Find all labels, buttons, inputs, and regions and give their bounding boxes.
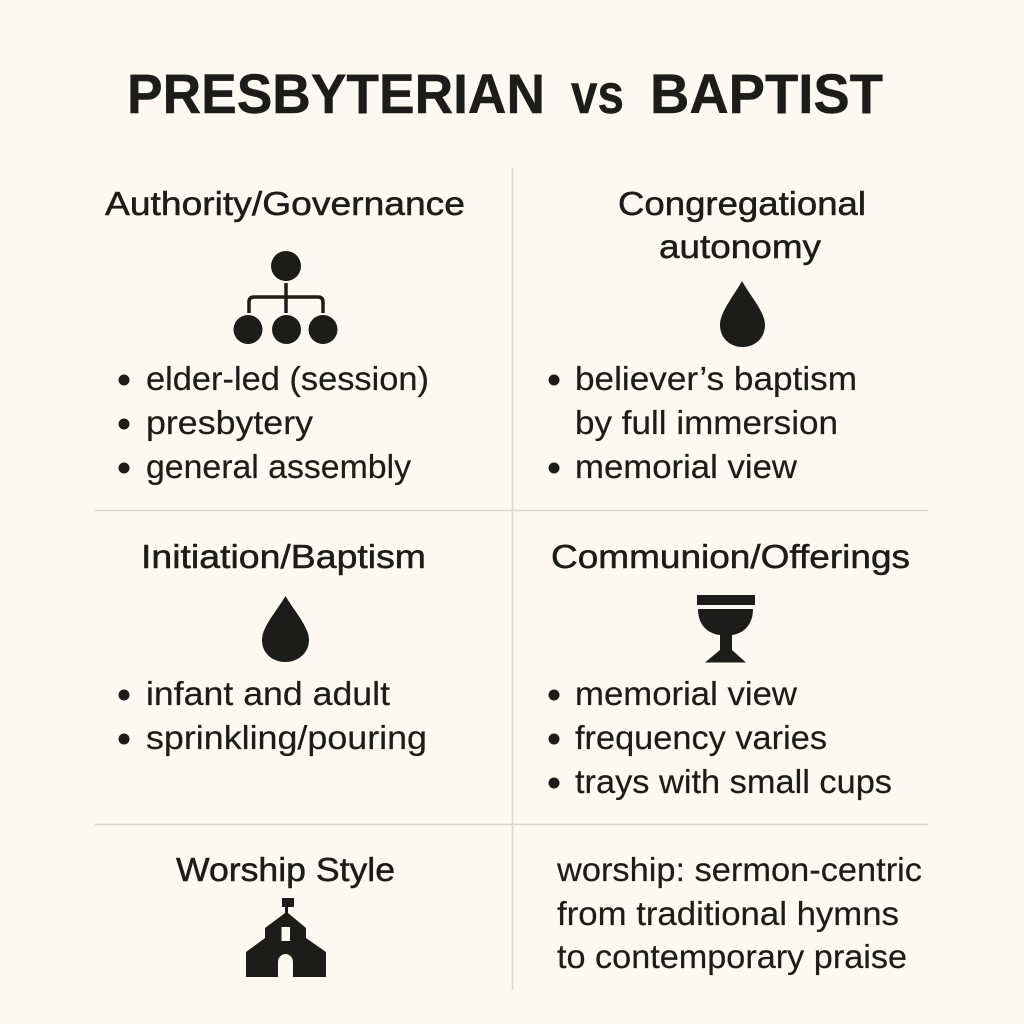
text block: baptist worship: worship: sermon-centric	[556, 852, 922, 889]
list: governance bullets: presbytery	[146, 405, 313, 442]
heading: initiation/baptism: Initiation/Baptism	[141, 539, 426, 576]
list: governance bullets: general assembly	[146, 449, 411, 486]
list: communion bullets: memorial view	[575, 676, 798, 713]
panel: presbyterian authority and governance	[105, 186, 465, 486]
list: baptism bullets: by full immersion	[575, 405, 838, 442]
panel: presbyterian worship style	[176, 852, 395, 977]
list: communion bullets: frequency varies	[575, 720, 827, 757]
list: governance bullets: elder-led (session)	[146, 361, 429, 398]
list: baptism bullets: believer’s baptism	[575, 361, 857, 398]
heading: authority/governance: Authority/Governance	[105, 186, 465, 223]
list: initiation bullets	[118, 676, 427, 757]
heading: communion/offerings: Communion/Offerings	[551, 539, 910, 576]
icon: water drop	[720, 281, 765, 347]
list: communion bullets: trays with small cups	[575, 764, 892, 801]
list: baptism bullets	[548, 361, 857, 486]
list: governance bullets	[118, 361, 429, 486]
title: BAPTIST	[650, 63, 883, 125]
text block: baptist worship: from traditional hymns	[557, 896, 899, 933]
icon: church	[246, 898, 326, 977]
list: baptism bullets: memorial view	[575, 449, 798, 486]
text block: baptist worship	[556, 852, 922, 976]
panel: baptist congregational autonomy	[548, 186, 866, 486]
icon: water drop	[262, 596, 309, 662]
text block: baptist worship: to contemporary praise	[557, 939, 907, 976]
heading: congregational autonomy: autonomy	[659, 229, 821, 266]
icon: chalice	[697, 595, 755, 662]
list: initiation bullets: infant and adult	[146, 676, 391, 713]
list: communion bullets	[548, 676, 892, 801]
panel: baptist communion and offerings	[548, 539, 910, 801]
heading: congregational autonomy: Congregational	[618, 186, 866, 223]
icon: hierarchy chart	[234, 251, 338, 344]
title	[127, 63, 883, 125]
title: PRESBYTERIAN	[127, 63, 545, 125]
list: initiation bullets: sprinkling/pouring	[146, 720, 427, 757]
title: vs	[571, 63, 624, 125]
heading: worship style: Worship Style	[176, 852, 395, 889]
panel: presbyterian initiation and baptism	[118, 539, 427, 757]
heading: congregational autonomy	[618, 186, 866, 266]
